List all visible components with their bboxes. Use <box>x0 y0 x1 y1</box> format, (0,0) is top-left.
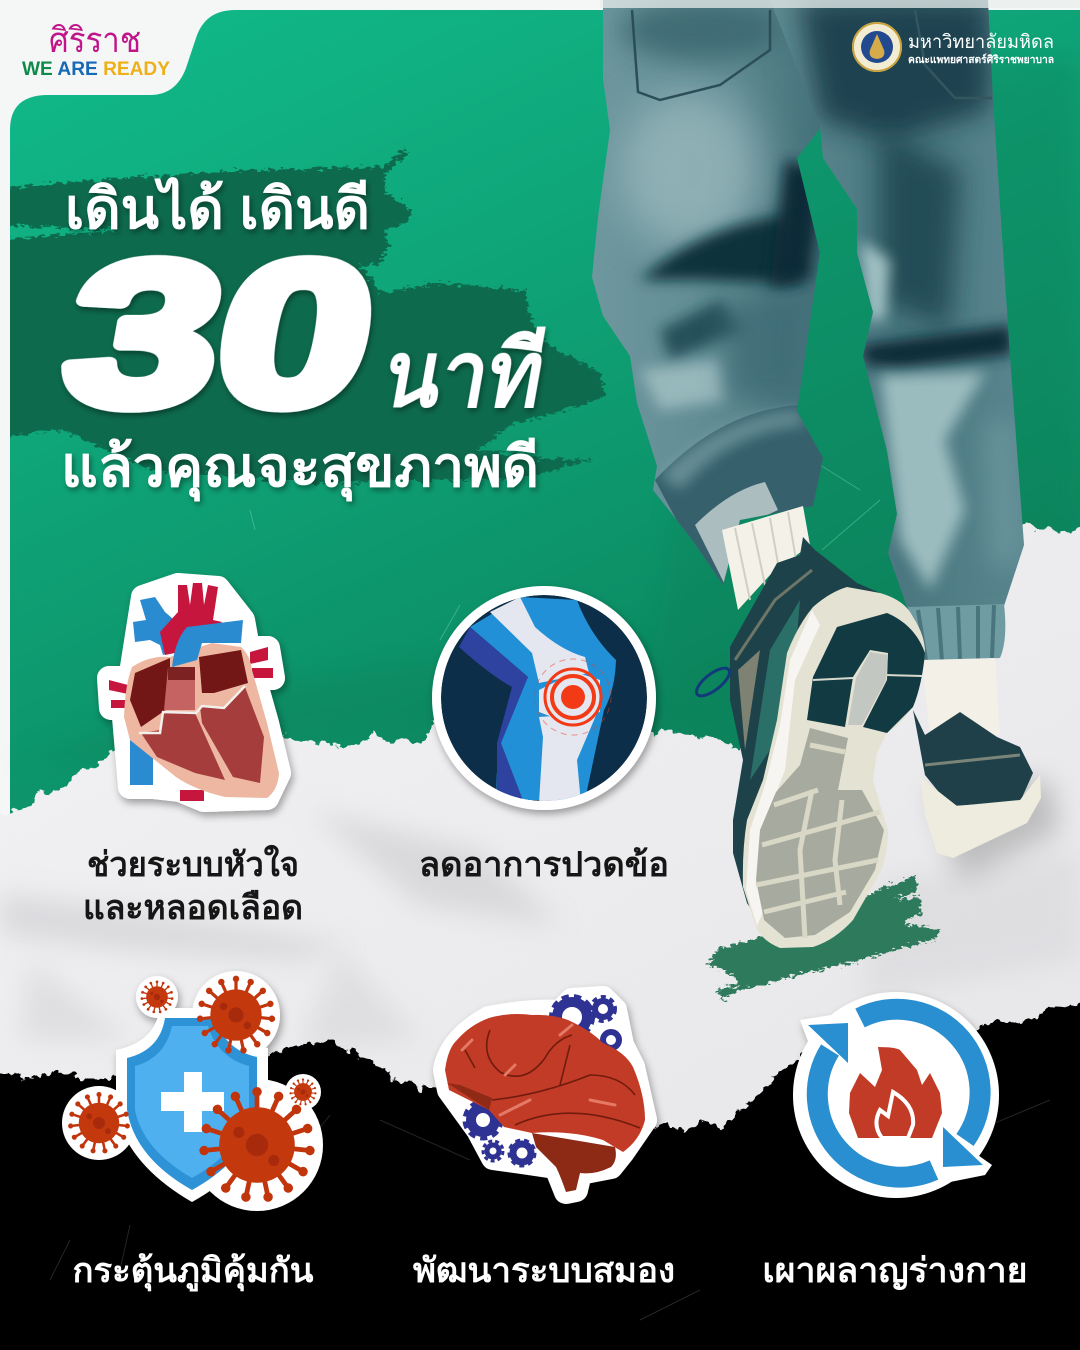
left shoe sole <box>743 587 925 948</box>
big number 30: 30 <box>49 219 392 448</box>
virus left <box>68 1092 130 1154</box>
flame <box>849 1047 942 1138</box>
shoe shadow <box>930 780 1060 880</box>
icon: fat burning <box>793 992 999 1198</box>
label: heart <box>83 844 303 927</box>
back pocket <box>632 10 770 100</box>
sticker <box>793 992 999 1198</box>
title line 3: แล้วคุณจะสุขภาพดี <box>61 435 539 502</box>
heart body <box>124 643 279 798</box>
white torn paper <box>0 520 1080 1200</box>
label: burn: เผาผลาญร่างกาย <box>762 1252 1028 1291</box>
shield <box>127 1018 257 1190</box>
green panel <box>10 10 1080 900</box>
right shoe upper <box>913 710 1033 806</box>
vessel stubs <box>109 647 273 801</box>
dark heel plate <box>807 613 925 733</box>
circular arrows <box>817 1009 980 1177</box>
brain highlights <box>462 1025 615 1115</box>
left sock <box>722 506 810 610</box>
cuff left <box>655 405 830 595</box>
brain folds <box>465 1030 640 1128</box>
heart chambers <box>130 650 248 727</box>
logo: Siriraj We Are Ready <box>22 21 170 80</box>
black torn band <box>0 1000 1080 1350</box>
virus upper <box>197 976 275 1054</box>
cerebellum <box>532 1133 616 1192</box>
cerebrum <box>445 1014 645 1152</box>
brush stroke under shoe <box>708 875 938 1000</box>
label: heart: และหลอดเลือด <box>83 889 303 927</box>
university logo <box>852 22 1054 72</box>
virus small top <box>140 980 174 1013</box>
grey heel insert <box>848 652 888 725</box>
left shoe upper <box>730 537 880 927</box>
label: knee: ลดอาการปวดข้อ <box>419 846 669 884</box>
university name: มหาวิทยาลัยมหิดล <box>908 32 1054 53</box>
pale strip at top <box>600 0 1080 8</box>
icon: heart <box>109 583 279 801</box>
shoe lace loop <box>692 663 734 701</box>
virus small right <box>289 1078 317 1106</box>
label: heart: ช่วยระบบหัวใจ <box>87 844 299 884</box>
right trouser leg <box>774 0 1024 610</box>
label: brain: พัฒนาระบบสมอง <box>413 1252 675 1290</box>
icon: knee joint <box>432 586 656 810</box>
aorta <box>160 583 222 655</box>
word minutes: นาที <box>377 323 553 426</box>
black scratches <box>50 1100 1050 1320</box>
right shoe sole <box>920 775 1041 858</box>
right sock <box>922 658 1000 735</box>
crest <box>852 22 902 72</box>
right pocket <box>915 10 992 98</box>
sticker outline <box>109 585 279 800</box>
gears <box>465 997 619 1166</box>
icon: brain and gears <box>445 997 645 1192</box>
sticker circle <box>432 586 656 810</box>
right cuff <box>908 604 1005 662</box>
sticker backing <box>62 971 323 1211</box>
vena cava <box>133 597 180 655</box>
brush strokes behind title <box>0 147 605 483</box>
logo wordmark Thai: ศิริราช <box>49 21 141 60</box>
knee illustration <box>441 595 647 803</box>
pain target <box>535 659 611 735</box>
paper creases <box>0 810 1080 1050</box>
icon: shield and viruses <box>62 971 323 1211</box>
photo: legs and sneakers <box>580 0 1060 948</box>
tread pad <box>756 728 884 938</box>
faculty name: คณะแพทยศาสตร์ศิริราชพยาบาล <box>908 53 1054 66</box>
logo tagline: WE ARE READY <box>22 58 170 80</box>
left trouser leg <box>592 0 823 585</box>
tread lugs <box>756 745 880 938</box>
title line 1: เดินได้ เดินดี <box>65 176 370 240</box>
pulmonary artery <box>172 620 243 667</box>
sticker outline <box>445 998 645 1192</box>
label: immunity: กระตุ้นภูมิคุ้มกัน <box>72 1252 314 1292</box>
virus big <box>199 1087 315 1203</box>
